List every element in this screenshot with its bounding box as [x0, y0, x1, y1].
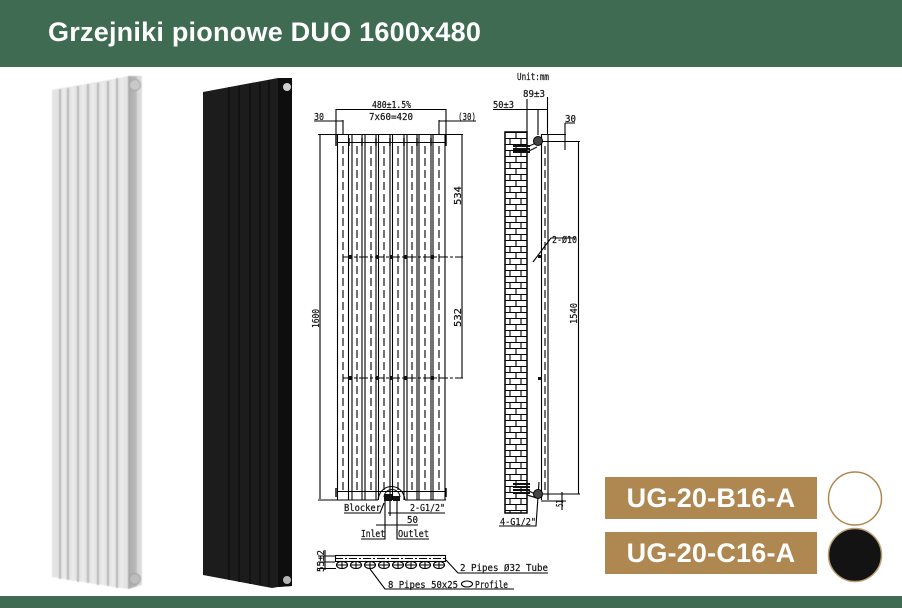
- black radiator photo: [203, 78, 292, 588]
- drawing labels: 55±2: [316, 550, 327, 572]
- drawing labels: 1540: [569, 303, 580, 324]
- drawing labels: 1600: [311, 309, 322, 328]
- drawing labels: 50: [407, 515, 418, 526]
- header band with title: [0, 0, 902, 67]
- drawing labels: 30: [565, 114, 576, 125]
- model code: white: [605, 477, 817, 519]
- segment height dimensions: [461, 135, 463, 378]
- drawing labels: 4-G1/2": [500, 517, 536, 528]
- technical drawing: front view: [314, 109, 476, 539]
- technical drawing: top section: [318, 550, 548, 589]
- cross bars: [343, 257, 463, 378]
- overall height dimension: [319, 135, 321, 499]
- drawing labels: 480±1.5%: [372, 100, 411, 111]
- drawing labels: 2 Pipes Ø32 Tube: [460, 562, 548, 574]
- drawing labels: 30: [314, 112, 324, 123]
- drawing labels: (30): [458, 112, 476, 123]
- eight oval profiles: [336, 562, 444, 568]
- drawing labels: [311, 72, 580, 591]
- drawing labels: 534: [453, 186, 464, 205]
- bottom leader: [499, 482, 539, 526]
- colour swatch: white: [828, 472, 882, 525]
- model code: black: [605, 532, 817, 574]
- leader lines: [344, 503, 445, 539]
- drawing labels: Blocker: [344, 503, 381, 514]
- drawing labels: Profile: [475, 580, 508, 591]
- radiator tubes: [338, 134, 445, 500]
- drawing labels: Unit:mm: [517, 72, 549, 83]
- wall brackets and fittings: [513, 145, 541, 494]
- drawing labels: 51: [555, 500, 566, 507]
- drawing labels: 8 Pipes 50x25: [388, 580, 458, 591]
- drawing labels: 50±3: [493, 100, 514, 111]
- valve dome: [378, 486, 405, 500]
- drawing labels: 532: [453, 308, 464, 327]
- drawing labels: 89±3: [523, 89, 545, 100]
- model code: black: UG-20-C16-A: [627, 538, 795, 568]
- upper and lower headers: [318, 134, 463, 142]
- white radiator photo: [52, 76, 142, 589]
- title: Grzejniki pionowe DUO 1600x480: [48, 17, 481, 47]
- tube centre lines: [343, 146, 439, 491]
- footer band: [0, 596, 902, 608]
- drawing labels: 2-G1/2": [410, 503, 445, 514]
- technical drawing: side view with brick wall: [493, 97, 580, 526]
- colour swatch: black: [828, 528, 882, 582]
- side dimensions: [493, 97, 580, 510]
- drawing labels: 2-Ø10: [552, 234, 577, 246]
- drawing labels: Inlet: [361, 529, 385, 540]
- wall bracket arrow: [533, 238, 576, 262]
- width dimensions: [314, 109, 476, 134]
- brick wall: [505, 132, 527, 513]
- model code: white: UG-20-B16-A: [627, 483, 795, 513]
- drawing labels: Outlet: [398, 529, 429, 540]
- cross bar joints and valve blocks: [348, 255, 434, 501]
- drawing labels: 7x60=420: [369, 112, 413, 123]
- side tube: [542, 134, 548, 500]
